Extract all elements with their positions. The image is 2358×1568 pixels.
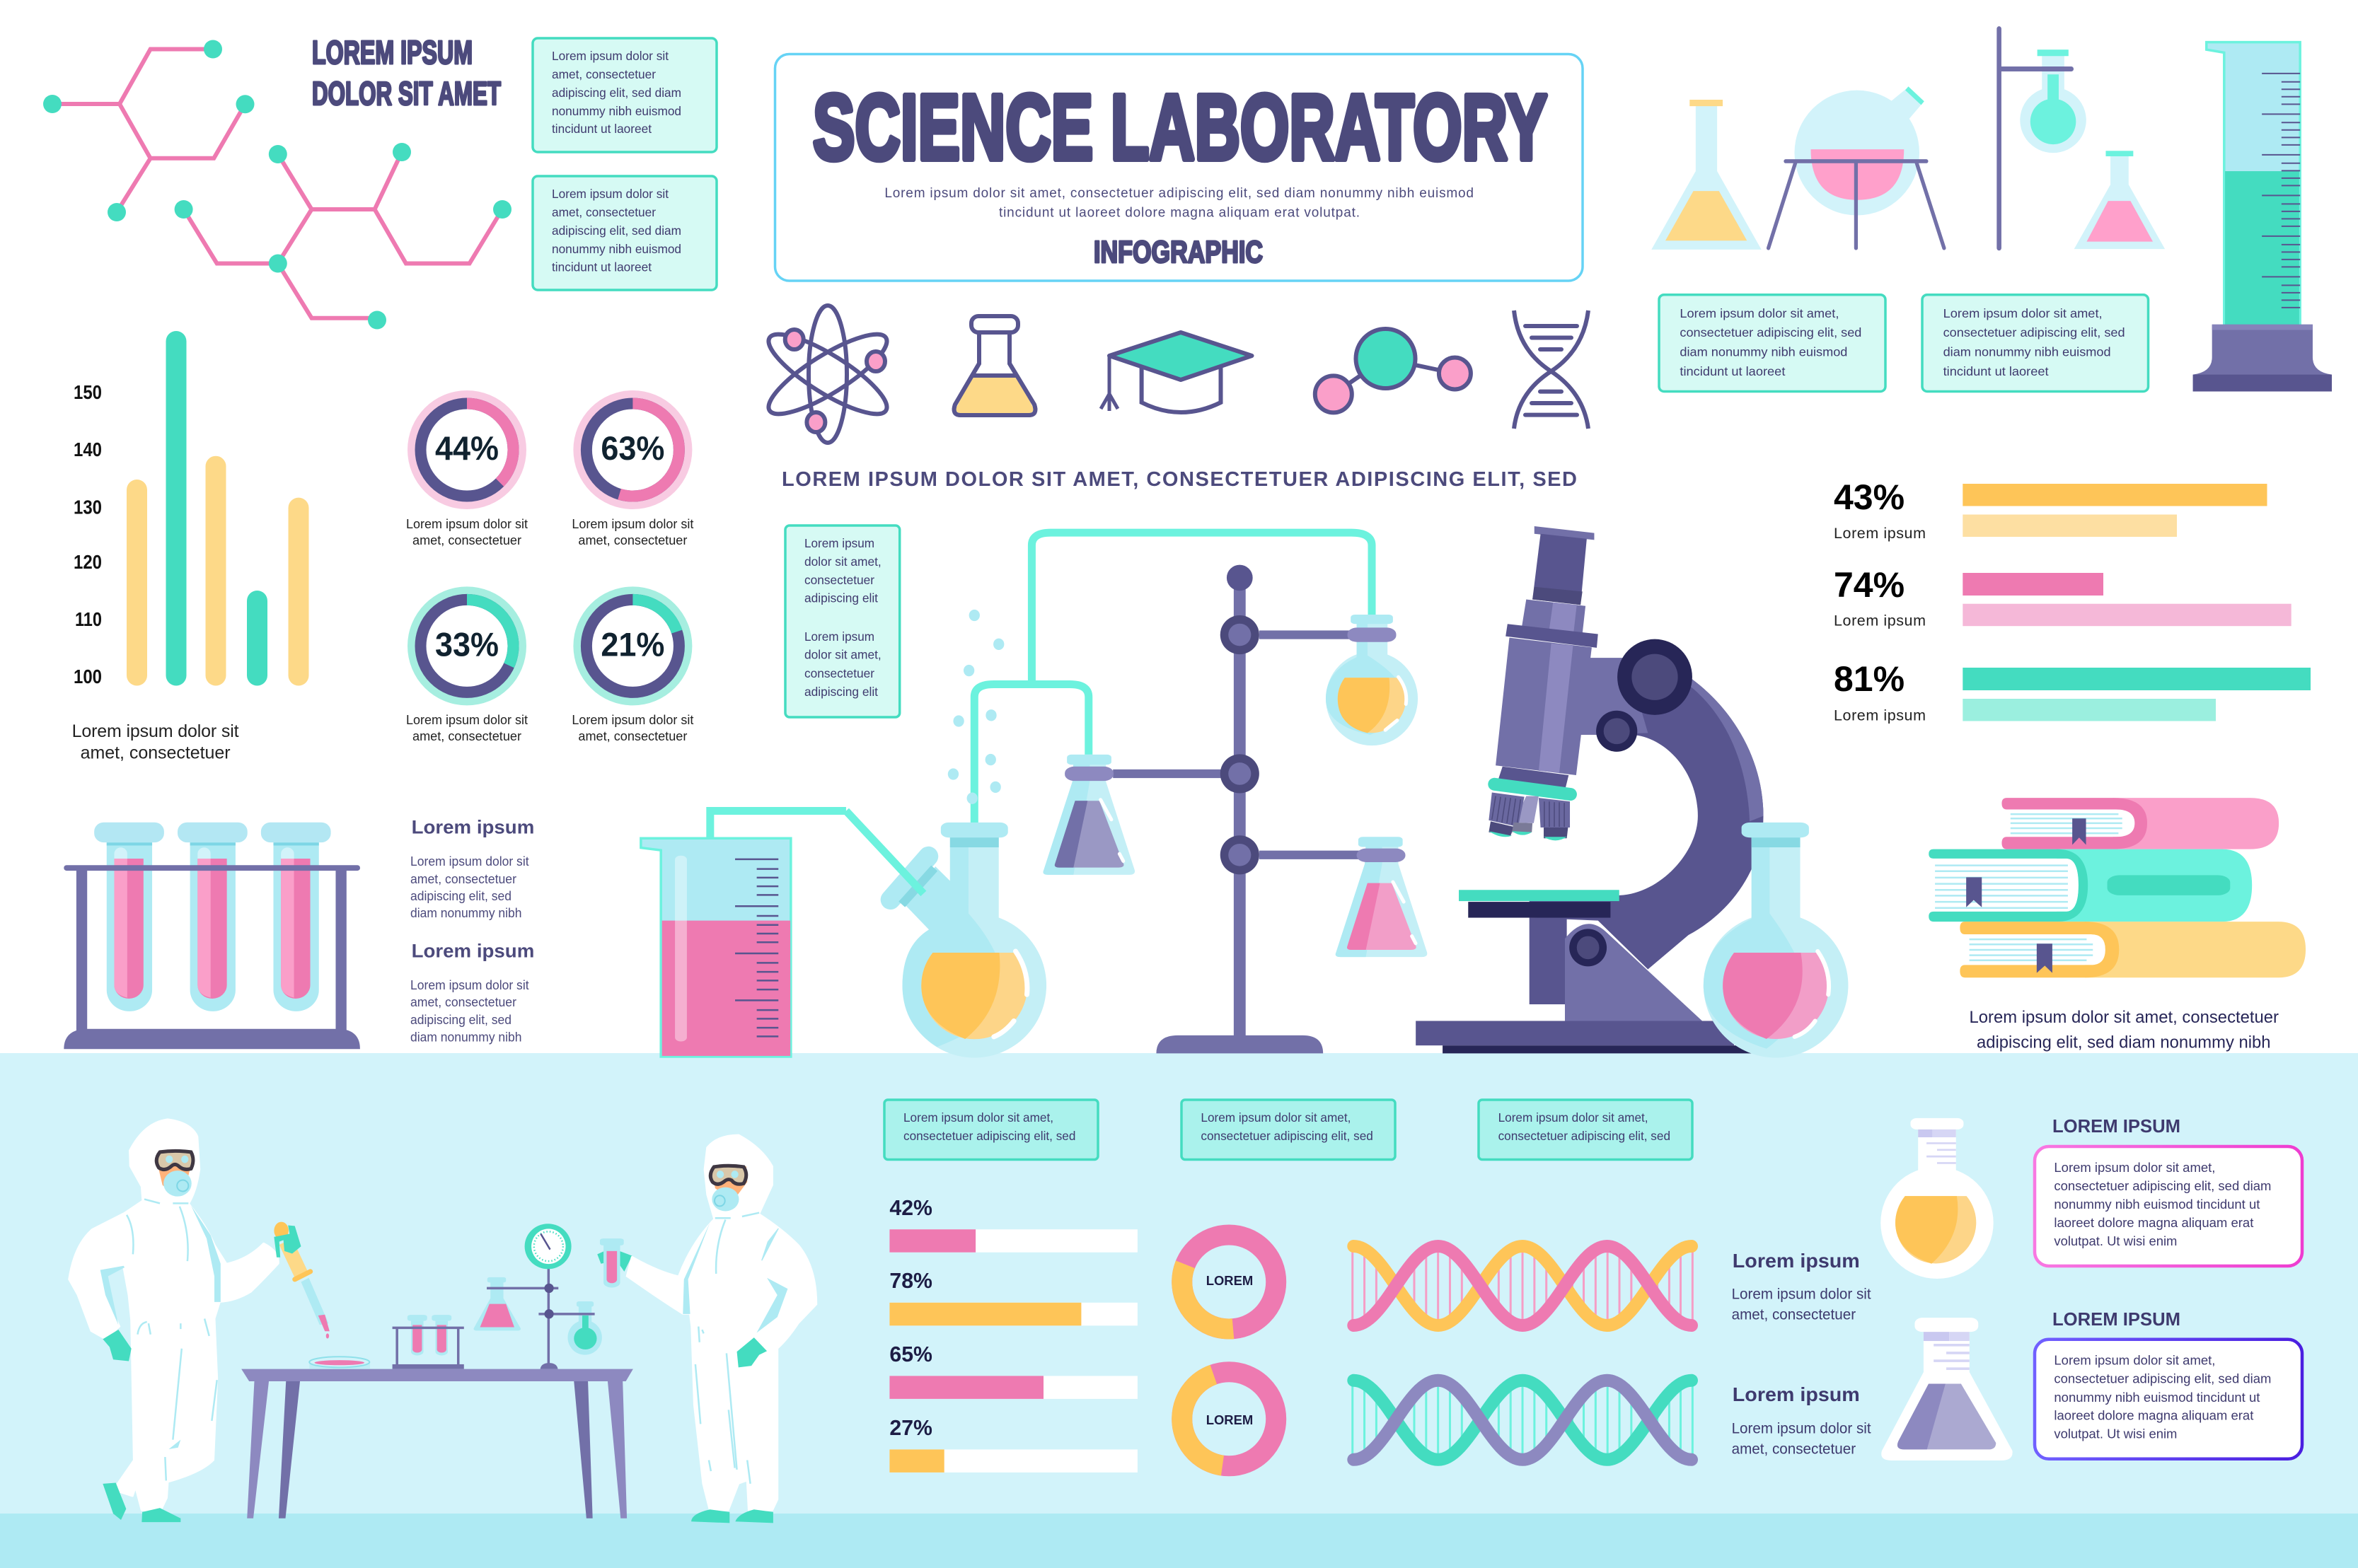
stat bars: 43 / 74 / 81: Lorem ipsum	[1834, 612, 1926, 629]
donut: 44%: amet, consectetuer	[412, 533, 521, 547]
dna helix: purple and teal	[1353, 1380, 1692, 1460]
donut: 21%: Lorem ipsum dolor sit	[572, 712, 693, 727]
donut: 44%: Lorem ipsum dolor sit	[406, 516, 528, 531]
knobs	[1569, 639, 1692, 966]
callout: violet outline: consectetuer adipiscing elit, sed diam	[2054, 1371, 2271, 1386]
text block: dna captions: amet, consectetuer	[1732, 1441, 1856, 1458]
bubbles	[948, 610, 1004, 804]
text block: lorem ipsum sections: Lorem ipsum dolor sit	[410, 978, 529, 992]
heading: lorem ipsum dolor sit amet	[312, 34, 501, 112]
horizontal progress bars: 78%	[889, 1268, 932, 1293]
arm	[1530, 658, 1763, 970]
text box: top left 1	[533, 38, 717, 152]
text box: top left 2: nonummy nibh euismod	[552, 242, 681, 256]
text box: glassware 1	[1659, 295, 1885, 392]
callout: pink outline: laoreet dolore magna aliquam erat	[2054, 1215, 2253, 1230]
text box: top left 2	[533, 176, 717, 290]
text box: center: adipiscing elit	[804, 591, 878, 605]
stat bars: 43 / 74 / 81: Lorem ipsum	[1834, 525, 1926, 542]
donut: 44%	[406, 390, 528, 547]
small flask pink	[473, 1277, 521, 1330]
bar chart: 110	[75, 608, 102, 630]
bar chart: amet, consectetuer	[81, 743, 231, 763]
small round flask teal	[567, 1301, 602, 1355]
callout: violet outline: Lorem ipsum dolor sit amet,	[2054, 1352, 2215, 1367]
text box: center: dolor sit amet,	[804, 648, 882, 662]
donut: 21%: 21%	[601, 625, 664, 663]
heading: lorem ipsum dolor sit amet: LOREM IPSUM	[312, 34, 473, 71]
donut: 63%: 63%	[601, 429, 664, 467]
icon: flask	[954, 316, 1035, 415]
donut: 33%: amet, consectetuer	[412, 728, 521, 743]
text block: lorem ipsum sections	[410, 816, 534, 1045]
glassware set: top right	[1651, 29, 2332, 391]
text box: top left 1: amet, consectetuer	[552, 67, 656, 81]
test tube rack	[64, 823, 360, 1049]
text block: lorem ipsum sections: adipiscing elit, sed	[410, 1013, 512, 1027]
text box: top left 2: tincidunt ut laoreet	[552, 260, 652, 274]
donut: 33%: Lorem ipsum dolor sit	[406, 712, 528, 727]
text box: glassware 2: consectetuer adipiscing elit, sed	[1943, 325, 2125, 339]
title panel: Lorem ipsum dolor sit amet, consectetuer adipiscing elit, sed diam nonummy nibh euismod	[884, 186, 1474, 201]
callout: pink outline: consectetuer adipiscing elit, sed diam	[2054, 1178, 2271, 1193]
retort stand	[1113, 565, 1359, 1053]
dna helix: pink and orange	[1353, 1245, 1692, 1325]
table	[241, 1369, 633, 1518]
stat bars: 43 / 74 / 81	[1834, 477, 2311, 724]
text box: center: Lorem ipsum	[804, 536, 874, 550]
icon: atom	[759, 306, 896, 443]
callout: pink outline: nonummy nibh euismod tincidunt ut	[2054, 1197, 2260, 1212]
text box: center	[785, 525, 900, 717]
stand with pressure gauge	[487, 1224, 595, 1369]
white flasks	[1880, 1118, 2013, 1460]
text box: center: adipiscing elit	[804, 685, 878, 699]
donut: 33%	[406, 586, 528, 743]
text boxes: bottom row	[884, 1100, 1692, 1160]
lab scene: scientists and table	[69, 1119, 816, 1523]
donut: lorem 1: LOREM	[1206, 1273, 1253, 1288]
text block: lorem ipsum sections: amet, consectetuer	[410, 872, 516, 886]
stack of books	[1929, 798, 2306, 977]
donut: lorem 2	[1176, 1366, 1282, 1472]
scientist left	[69, 1119, 278, 1522]
pipette	[274, 1222, 330, 1338]
text box: glassware 1: tincidunt ut laoreet	[1680, 364, 1786, 378]
horizontal progress bars: 27%	[889, 1415, 932, 1440]
bar chart: 150	[74, 381, 102, 403]
text block: lorem ipsum sections: Lorem ipsum dolor sit	[410, 854, 529, 869]
caption under books	[1970, 1008, 2279, 1052]
bar chart: 130	[74, 496, 102, 518]
text box: glassware 1: consectetuer adipiscing elit, sed	[1680, 325, 1861, 339]
stage	[1459, 890, 1619, 918]
text box: top left 1: Lorem ipsum dolor sit	[552, 49, 669, 63]
bar chart: Lorem ipsum dolor sit	[72, 721, 239, 741]
text box: top left 2: amet, consectetuer	[552, 205, 656, 219]
donut: 44%: 44%	[435, 429, 499, 467]
clamp stand with hanging flask	[1999, 29, 2086, 248]
round flask pink	[1704, 823, 1848, 1058]
round flask with side arm	[846, 811, 1046, 1058]
conical flask purple	[1043, 755, 1135, 875]
horizontal progress bars: 42%	[889, 1195, 932, 1220]
text box: center: consectetuer	[804, 666, 874, 680]
round white flask	[1880, 1118, 1994, 1279]
conical white flask	[1881, 1318, 2013, 1460]
book: teal	[1929, 849, 2252, 922]
icon: molecule	[1315, 329, 1471, 412]
conical flask pink	[1336, 837, 1427, 957]
text block: dna captions: Lorem ipsum dolor sit	[1732, 1286, 1871, 1303]
title panel: tincidunt ut laoreet dolore magna aliquam erat volutpat.	[999, 206, 1360, 221]
text block: dna captions: Lorem ipsum dolor sit	[1732, 1421, 1871, 1437]
text box: center: consectetuer	[804, 573, 874, 587]
donut: 63%: amet, consectetuer	[578, 533, 687, 547]
chemistry apparatus	[641, 533, 1427, 1058]
caption under books: Lorem ipsum dolor sit amet, consectetuer	[1970, 1008, 2279, 1027]
connecting tubes	[710, 533, 1372, 838]
tube and objectives	[1489, 526, 1598, 840]
text boxes: bottom row: Lorem ipsum dolor sit amet,	[1201, 1110, 1351, 1125]
text block: dna captions: Lorem ipsum	[1733, 1250, 1860, 1272]
text block: dna captions: Lorem ipsum	[1733, 1383, 1860, 1405]
title panel: INFOGRAPHIC	[1094, 235, 1263, 269]
stat bars: 43 / 74 / 81: 74%	[1834, 565, 1905, 605]
text box: glassware 2: diam nonummy nibh euismod	[1943, 345, 2111, 359]
beaker with pink liquid	[641, 838, 791, 1057]
callout: violet outline: laoreet dolore magna aliquam erat	[2054, 1408, 2253, 1423]
measuring cylinder	[2193, 42, 2332, 391]
horizontal progress bars: 65%	[889, 1342, 932, 1366]
text boxes: bottom row: Lorem ipsum dolor sit amet,	[903, 1110, 1053, 1125]
text boxes: bottom row: consectetuer adipiscing elit, sed	[1498, 1129, 1670, 1143]
text block: dna captions: amet, consectetuer	[1732, 1306, 1856, 1323]
callout: pink outline: volutpat. Ut wisi enim	[2054, 1233, 2177, 1248]
bar chart	[72, 331, 308, 763]
text box: top left 2: adipiscing elit, sed diam	[552, 223, 681, 238]
donut: 21%	[572, 586, 693, 743]
tube 1	[94, 823, 164, 1011]
bar chart: 120	[74, 551, 102, 573]
molecule network	[43, 40, 512, 330]
donut: 33%: 33%	[435, 625, 499, 663]
flask: yellow	[1651, 100, 1762, 250]
base	[1416, 918, 1752, 1053]
flask: pink	[2074, 151, 2165, 249]
callout: violet outline: nonummy nibh euismod tincidunt ut	[2054, 1390, 2260, 1405]
small tube rack	[393, 1315, 464, 1369]
text box: glassware 1: diam nonummy nibh euismod	[1680, 345, 1847, 359]
text block: lorem ipsum sections: Lorem ipsum	[412, 816, 534, 837]
text box: glassware 2: Lorem ipsum dolor sit amet,	[1943, 306, 2103, 320]
text box: glassware 1: Lorem ipsum dolor sit amet,	[1680, 306, 1839, 320]
scientist right	[627, 1134, 816, 1523]
hanging round flask	[1326, 615, 1418, 745]
callout: pink outline: Lorem ipsum dolor sit amet,	[2054, 1160, 2215, 1175]
microscope	[1416, 526, 1848, 1058]
text box: top left 2: Lorem ipsum dolor sit	[552, 187, 669, 201]
text block: lorem ipsum sections: diam nonummy nibh	[410, 1030, 522, 1045]
donut: 63%: Lorem ipsum dolor sit	[572, 516, 693, 531]
text box: center: dolor sit amet,	[804, 554, 882, 569]
tube 3	[261, 823, 331, 1011]
text box: center: Lorem ipsum	[804, 629, 874, 644]
text boxes: bottom row: consectetuer adipiscing elit, sed	[1201, 1129, 1373, 1143]
text box: top left 1: adipiscing elit, sed diam	[552, 86, 681, 100]
text boxes: bottom row: Lorem ipsum dolor sit amet,	[1498, 1110, 1648, 1125]
text box: glassware 2: tincidunt ut laoreet	[1943, 364, 2049, 378]
caption under books: adipiscing elit, sed diam nonummy nibh	[1977, 1033, 2271, 1052]
donut: lorem 1	[1178, 1231, 1280, 1333]
text box: glassware 2	[1922, 295, 2148, 392]
petri dish	[309, 1357, 370, 1369]
callout: violet outline: volutpat. Ut wisi enim	[2054, 1426, 2177, 1441]
icon: graduation cap	[1101, 332, 1252, 412]
book: yellow	[1960, 922, 2306, 977]
text boxes: bottom row: consectetuer adipiscing elit, sed	[903, 1129, 1075, 1143]
test tube held	[597, 1238, 632, 1287]
horizontal progress bars	[889, 1195, 1138, 1473]
stat bars: 43 / 74 / 81: 81%	[1834, 659, 1905, 699]
callout: violet outline	[2035, 1308, 2302, 1459]
heading: lorem ipsum dolor sit amet: DOLOR SIT AMET	[312, 75, 501, 112]
text box: top left 1: tincidunt ut laoreet	[552, 122, 652, 136]
text block: lorem ipsum sections: adipiscing elit, sed	[410, 889, 512, 903]
text block: lorem ipsum sections: amet, consectetuer	[410, 995, 516, 1009]
book: pink	[2001, 798, 2279, 849]
donut: 63%	[572, 390, 693, 547]
text block: lorem ipsum sections: Lorem ipsum	[412, 941, 534, 962]
donut: lorem 2: LOREM	[1206, 1412, 1253, 1427]
donut: 21%: amet, consectetuer	[578, 728, 687, 743]
title panel	[775, 54, 1583, 281]
callout: pink outline	[2035, 1115, 2302, 1266]
text block: lorem ipsum sections: diam nonummy nibh	[410, 906, 522, 920]
stat bars: 43 / 74 / 81: 43%	[1834, 477, 1905, 517]
stat bars: 43 / 74 / 81: Lorem ipsum	[1834, 707, 1926, 724]
round flask on tripod	[1769, 88, 1944, 248]
tube 2	[178, 823, 248, 1011]
callout: pink outline: LOREM IPSUM	[2052, 1115, 2180, 1137]
text block: dna captions	[1732, 1250, 1871, 1458]
text box: top left 1: nonummy nibh euismod	[552, 104, 681, 118]
bar chart: 140	[74, 439, 102, 460]
callout: violet outline: LOREM IPSUM	[2052, 1308, 2180, 1330]
title panel: SCIENCE LABORATORY	[813, 75, 1547, 179]
bar chart: 100	[74, 666, 102, 687]
subheading: LOREM IPSUM DOLOR SIT AMET, CONSECTETUER ADIPISCING ELIT, SED	[782, 468, 1577, 491]
icon: dna	[1514, 310, 1588, 429]
